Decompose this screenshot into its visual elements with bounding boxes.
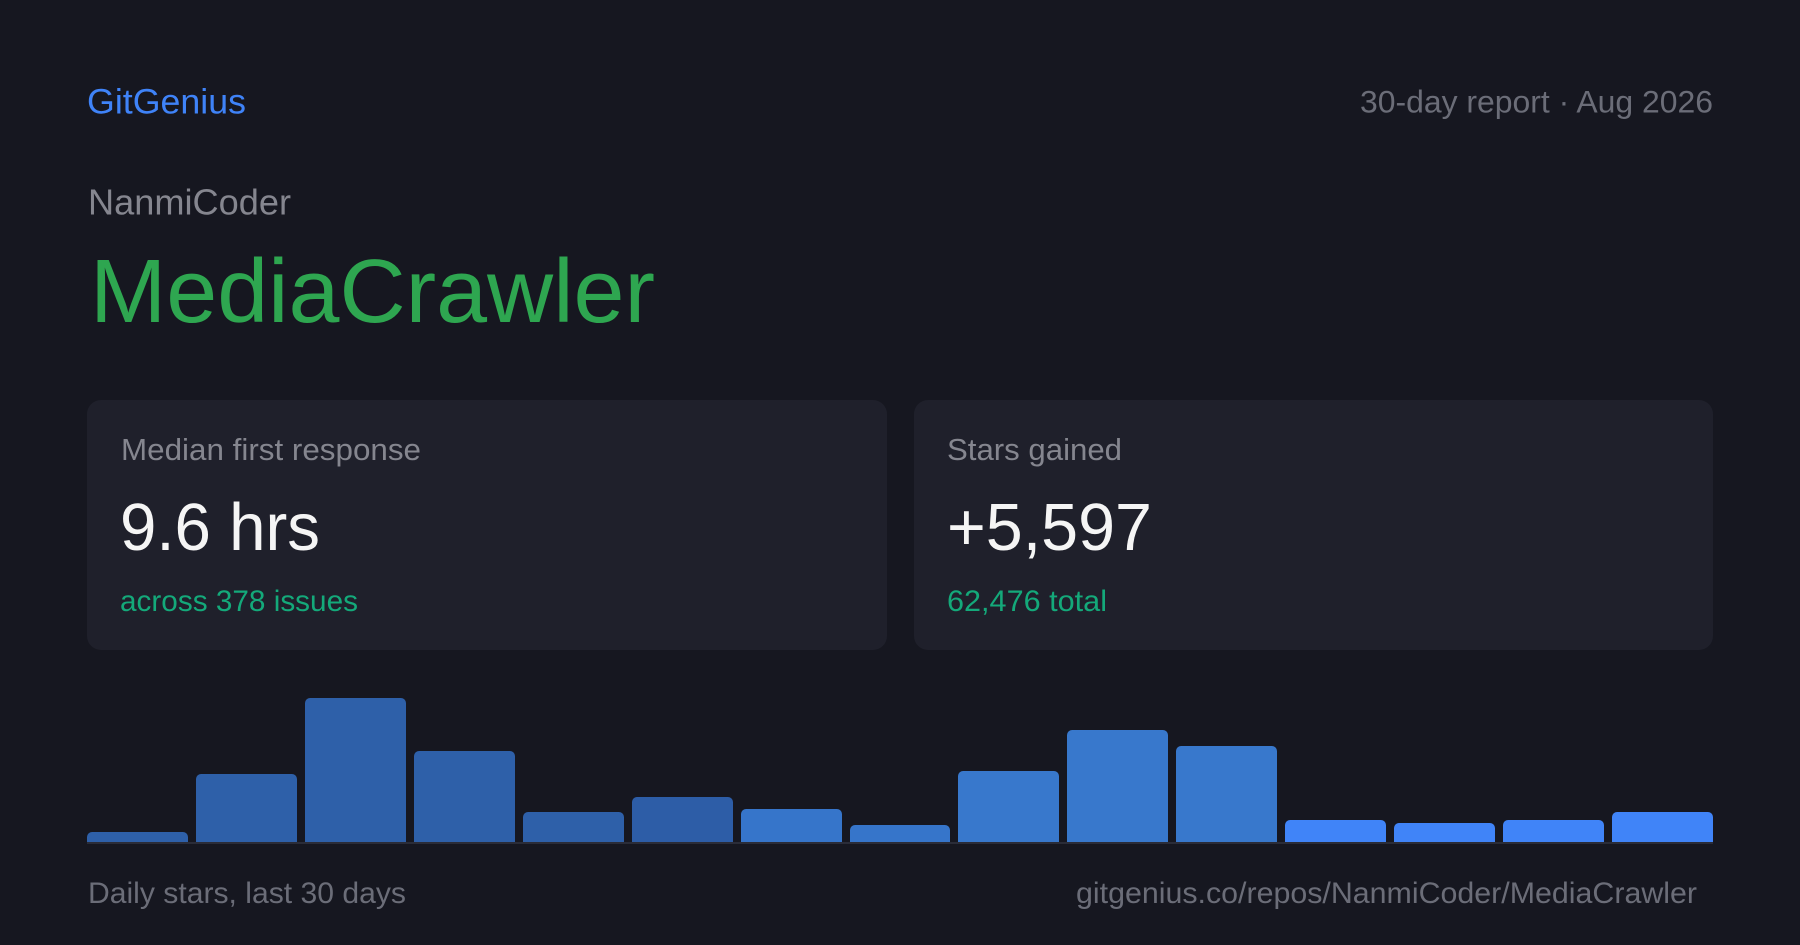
repository url: gitgenius.co/repos/NanmiCoder/MediaCrawler [1076,877,1697,910]
metric note: 62,476 total [947,585,1107,618]
metric label: Median first response [121,433,421,467]
bar chart: daily stars [87,698,1713,844]
repository owner: NanmiCoder [88,182,291,222]
panel: median first response [87,400,887,650]
metric note: across 378 issues [120,585,358,618]
brand name: GitGenius [87,82,246,122]
metric value: +5,597 [947,490,1152,565]
chart caption: Daily stars, last 30 days [88,877,406,910]
panel: stars gained [914,400,1713,650]
metric label: Stars gained [947,433,1122,467]
report period: 30-day report · Aug 2026 [1360,84,1713,120]
title: repository name: MediaCrawler [90,242,655,342]
metric value: 9.6 hrs [120,490,320,565]
